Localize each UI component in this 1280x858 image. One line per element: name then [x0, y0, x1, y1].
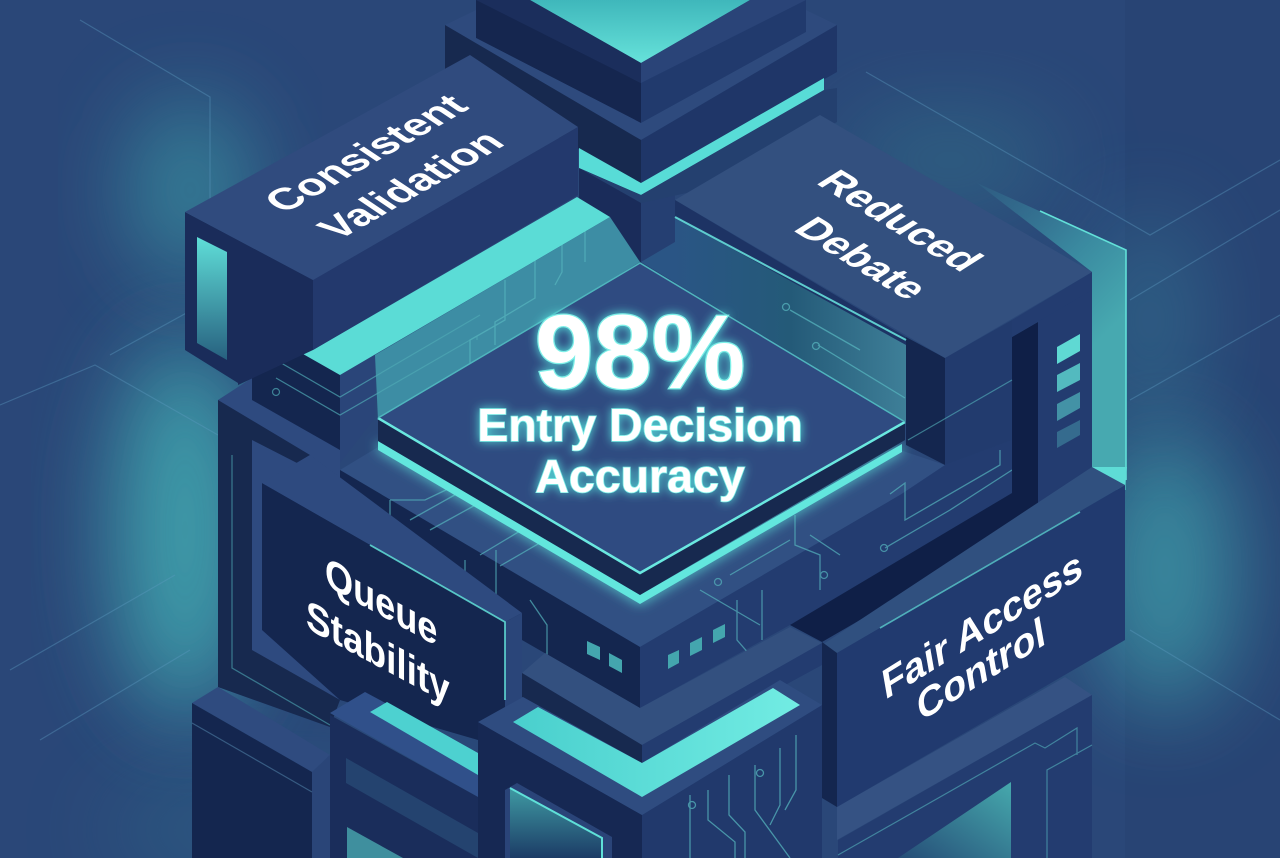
top stacked block	[445, 0, 837, 290]
panel: left frame	[218, 378, 522, 727]
panel: bottom stacked blocks	[192, 627, 1092, 858]
headline: 98% Entry Decision Accuracy: Entry Decision	[477, 399, 803, 451]
panel: Fair Access Control block	[822, 467, 1127, 807]
panel: Reduced Debate block	[675, 115, 1092, 642]
label: Queue Stability: Stability	[306, 590, 450, 714]
panel: back glass walls and circuits	[375, 217, 906, 422]
label: Reduced Debate: Debate	[784, 210, 939, 306]
label: Reduced Debate: Reduced	[807, 163, 993, 278]
block: bottom centre	[478, 680, 822, 858]
panel: right teal bracket band	[977, 183, 1126, 490]
indicator squares: lower tier right	[668, 624, 725, 669]
headline: 98% Entry Decision Accuracy	[477, 294, 803, 502]
block: bottom mid-left	[330, 692, 478, 858]
panel: Consistent Validation block	[185, 55, 610, 463]
indicator squares: lower tier left	[587, 641, 622, 673]
bar: central tier shelf	[522, 627, 822, 763]
panel: Queue Stability block	[262, 455, 522, 740]
block: bottom right	[837, 677, 1092, 858]
headline: 98% Entry Decision Accuracy: Accuracy	[535, 450, 745, 502]
label: Consistent Validation: Validation	[308, 124, 514, 246]
panel: centre diamond	[378, 263, 905, 604]
label: Fair Access Control: Control	[914, 608, 1048, 731]
indicator squares: right column	[1057, 334, 1080, 448]
block: bottom left	[192, 687, 330, 858]
headline: 98% Entry Decision Accuracy: 98%	[535, 294, 745, 411]
label: Consistent Validation: Consistent	[254, 88, 478, 219]
label: Fair Access Control: Fair Access	[879, 541, 1085, 709]
label: Queue Stability: Queue	[325, 547, 437, 656]
panel: lower circuit tier	[340, 440, 1012, 708]
